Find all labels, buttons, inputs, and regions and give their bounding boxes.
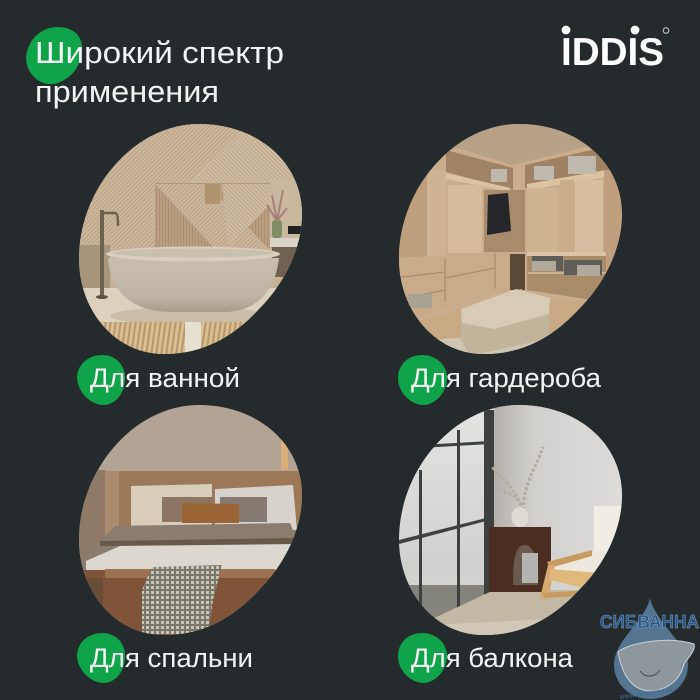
window frames [399, 410, 494, 608]
chair [594, 506, 622, 566]
watermark: Сибванна logo [600, 598, 699, 700]
panel: balcony photo [395, 400, 630, 640]
green blob [77, 355, 125, 405]
faucet [100, 210, 104, 296]
mascot face [640, 670, 660, 676]
title [35, 35, 284, 109]
knitted throw [142, 565, 222, 634]
green blob [398, 633, 447, 683]
sheet [86, 544, 295, 571]
label: wardrobe [398, 355, 602, 405]
side table, plant and clock [270, 238, 300, 247]
headboard [105, 471, 305, 541]
title green blob [26, 27, 82, 84]
title: применения [35, 74, 219, 109]
panel: wardrobe photo [395, 120, 630, 360]
logo: IDDIS: IDDIS [561, 31, 664, 74]
title: Широкий спектр [35, 35, 284, 70]
floor [83, 288, 276, 328]
striped rug [100, 322, 246, 354]
ceiling [448, 124, 588, 165]
vase [512, 507, 528, 527]
white wall beside window [494, 400, 629, 585]
carpet and floor [434, 590, 579, 635]
bench [83, 570, 276, 635]
brand name: СИБВАННА [600, 612, 699, 632]
window floor [409, 585, 484, 620]
hanging sections [448, 185, 482, 253]
left wall cabinets [399, 175, 427, 258]
hanging clothes [487, 193, 511, 235]
label text: Для спальни [90, 643, 253, 673]
ottoman [461, 289, 550, 356]
panel: bedroom photo [75, 400, 307, 640]
label text: Для ванной [90, 363, 240, 393]
bathtub [108, 258, 279, 312]
boxes [491, 169, 507, 182]
panel: bathroom photo [75, 120, 307, 360]
blanket [82, 523, 297, 570]
tub mascot [618, 640, 694, 691]
drawers [399, 256, 446, 318]
label text: Для балкона [411, 643, 574, 673]
dried branches [492, 447, 543, 510]
top shelves [446, 150, 513, 190]
brown side table [489, 527, 551, 592]
label: balcony [398, 633, 574, 683]
floor and rug [420, 300, 588, 354]
label: bedroom [77, 633, 253, 683]
water drop [614, 598, 688, 699]
label text: Для гардероба [411, 363, 602, 393]
label: bathroom [77, 355, 240, 405]
pillows [131, 484, 212, 528]
wall panels [75, 120, 307, 220]
green blob [77, 633, 125, 683]
green blob [398, 355, 447, 405]
open bins [527, 256, 606, 300]
